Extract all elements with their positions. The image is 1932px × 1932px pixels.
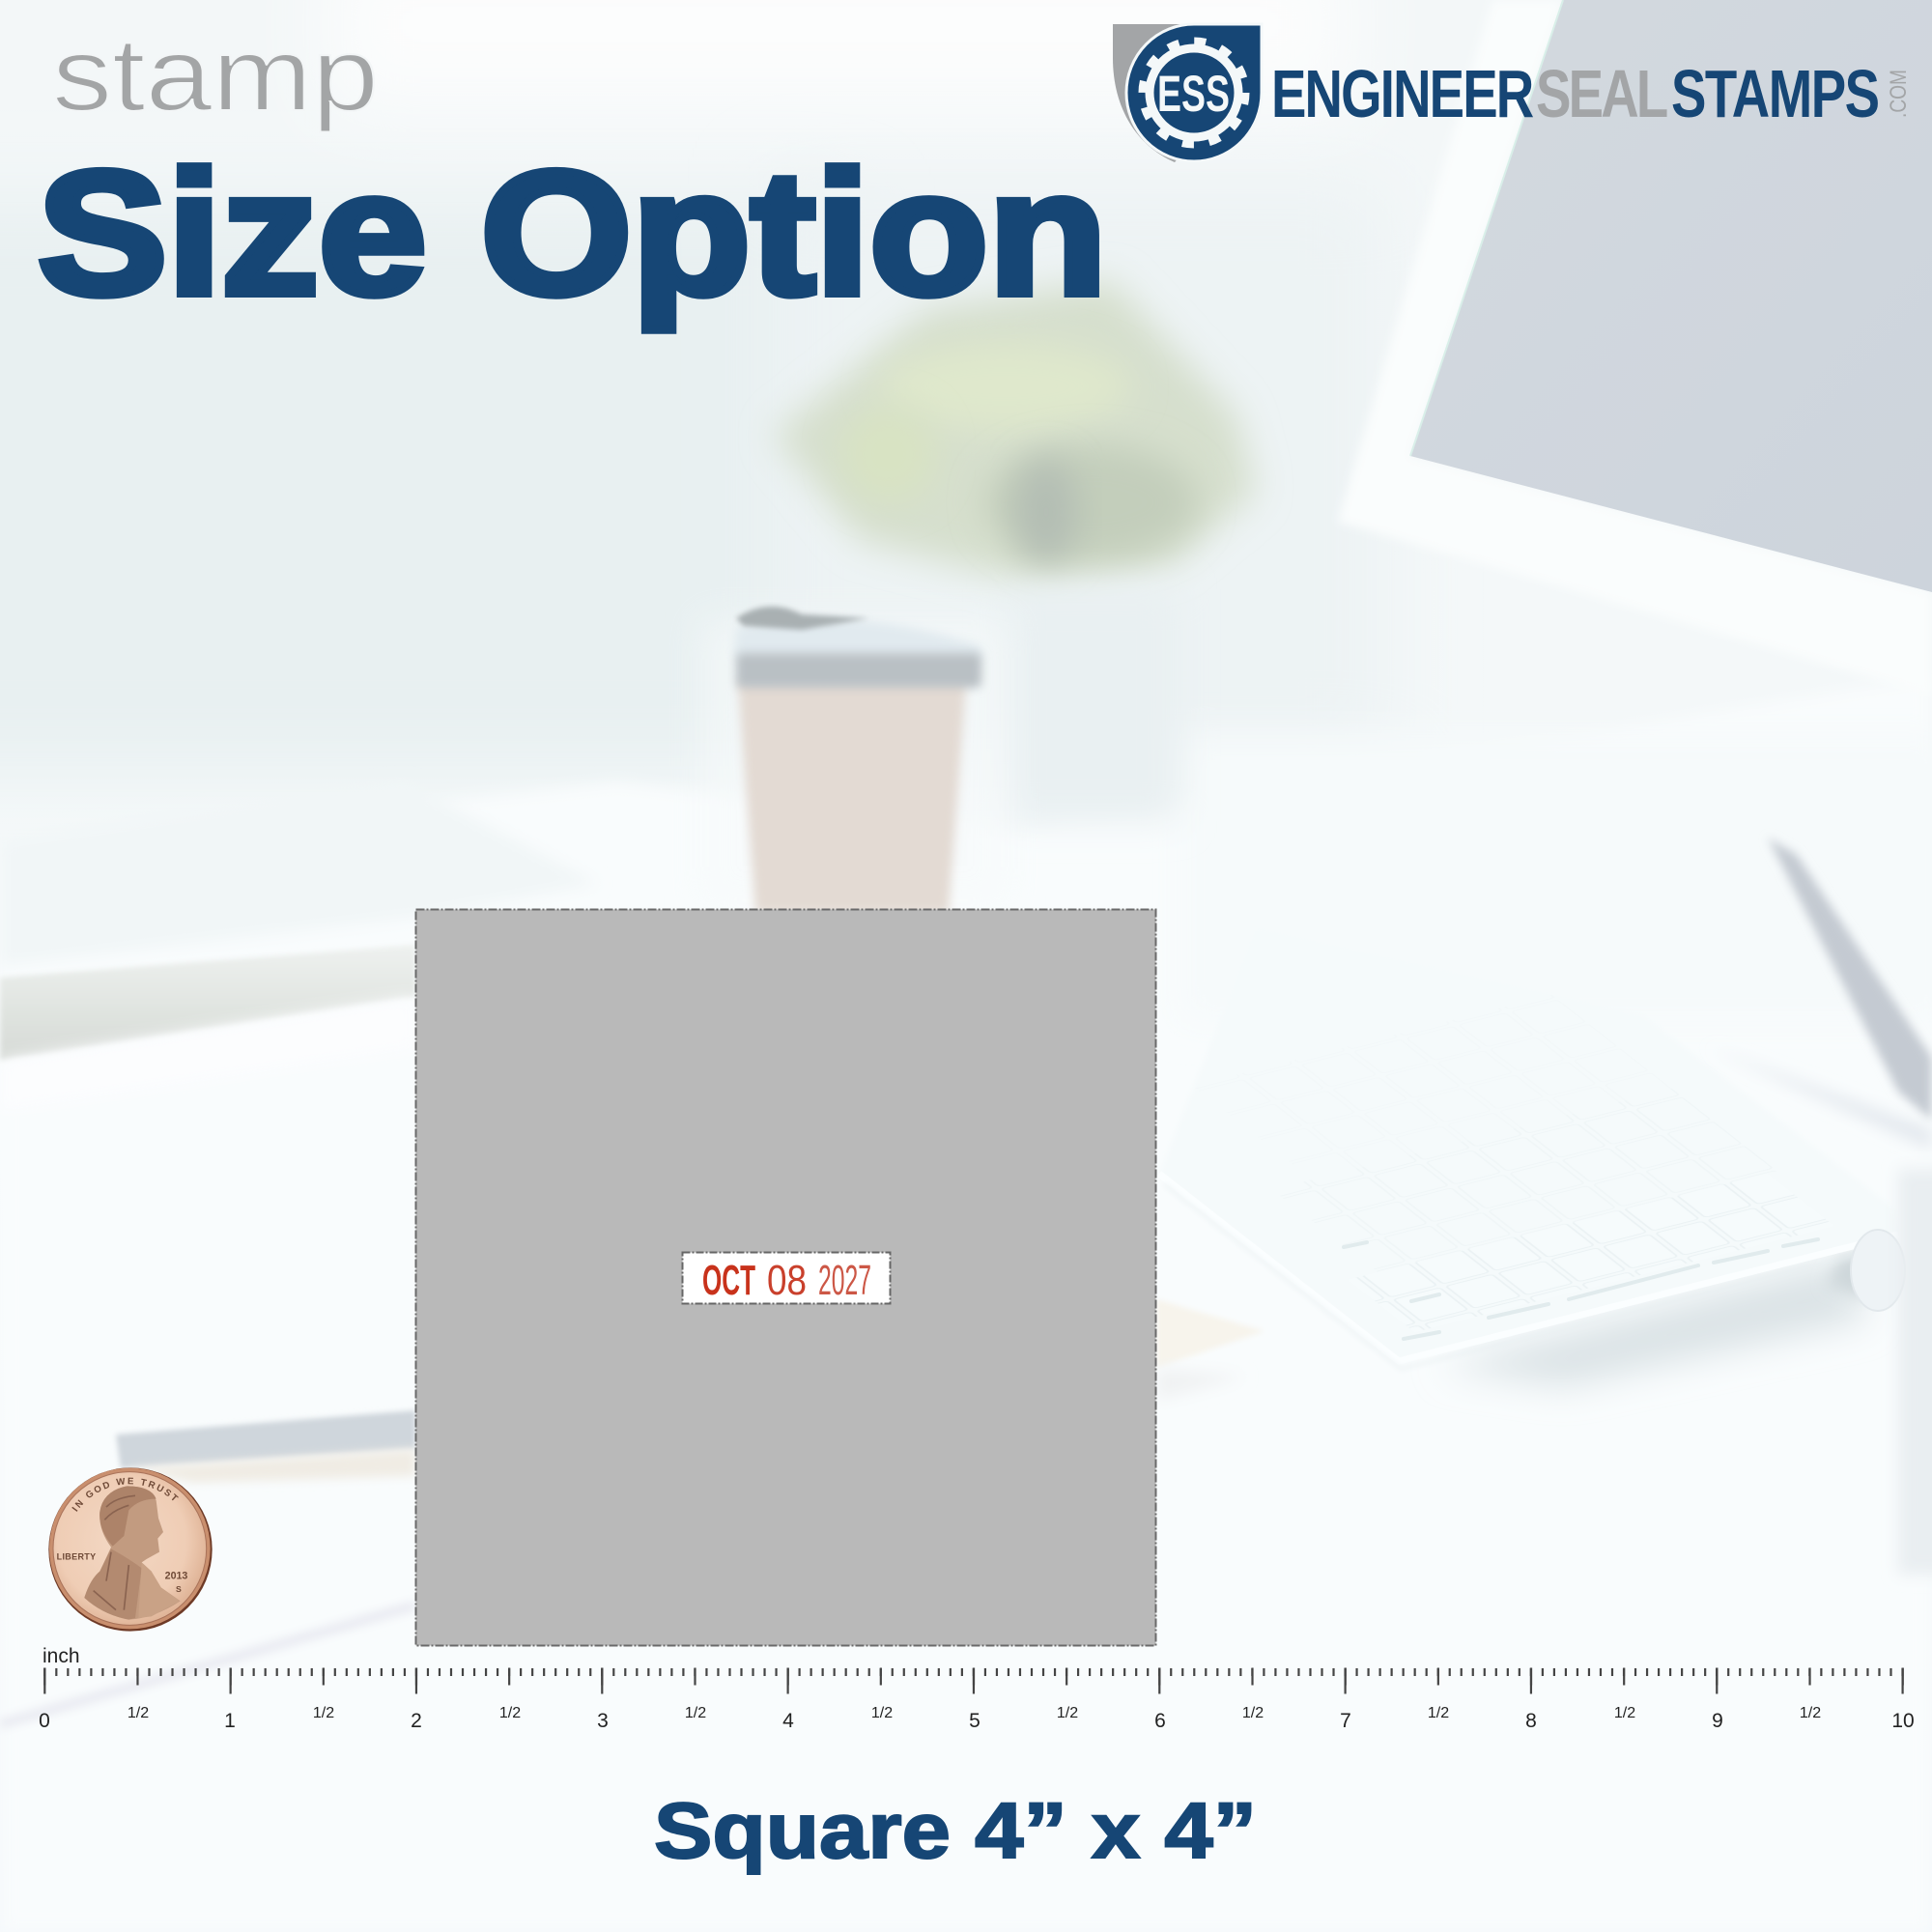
ruler inch numbers: 7 — [1340, 1710, 1351, 1732]
coffee cup — [700, 607, 1009, 913]
ruler unit label: inch — [43, 1645, 80, 1667]
icon: penny for scale: IN GOD WE TRUST — [71, 1478, 179, 1512]
date stamp sample: 08 — [767, 1257, 807, 1304]
plant pot — [1005, 589, 1179, 821]
logo emblem — [1113, 24, 1262, 162]
ruler inch numbers: 2 — [411, 1710, 422, 1732]
penny inscriptions: 2013 — [165, 1570, 187, 1581]
ruler inch numbers: 1 — [224, 1710, 236, 1732]
ruler half marks: 1/2 — [1057, 1705, 1078, 1721]
envelope — [1156, 1299, 1264, 1401]
logo: Engineer Seal Stamps — [1113, 24, 1912, 162]
logo wordmark: SEAL — [1536, 57, 1668, 132]
keyboard key edges — [1344, 1239, 1818, 1339]
pen on left — [0, 1410, 415, 1724]
heading: Size Option: Size Option — [38, 134, 1107, 331]
penny inscriptions — [57, 1552, 187, 1594]
ruler half marks: 1/2 — [128, 1705, 149, 1721]
heading: stamp: stamp — [52, 15, 379, 132]
penny inscriptions: LIBERTY — [57, 1552, 96, 1562]
ruler inch numbers — [39, 1710, 1915, 1732]
tablet and book on desk — [0, 782, 599, 1111]
inch ruler — [39, 1645, 1915, 1732]
ruler inch numbers: 10 — [1891, 1710, 1915, 1732]
ruler inch numbers: 9 — [1712, 1710, 1723, 1732]
icon: penny for scale — [48, 1467, 213, 1632]
ruler inch numbers: 6 — [1154, 1710, 1166, 1732]
ruler half marks: 1/2 — [685, 1705, 706, 1721]
date stamp sample: 2027 — [818, 1257, 871, 1304]
ruler inch numbers: 8 — [1525, 1710, 1537, 1732]
ruler half marks: 1/2 — [1800, 1705, 1821, 1721]
ruler half marks: 1/2 — [871, 1705, 893, 1721]
date stamp sample — [682, 1252, 891, 1304]
logo emblem: ESS — [1157, 66, 1230, 123]
ruler ticks — [43, 1672, 1904, 1681]
ruler half marks: 1/2 — [1614, 1705, 1635, 1721]
logo wordmark: .COM — [1886, 70, 1912, 118]
portrait — [84, 1486, 181, 1620]
size caption: Square 4” x 4” — [654, 1787, 1257, 1875]
ruler half marks: 1/2 — [1242, 1705, 1264, 1721]
date stamp sample: OCT — [702, 1257, 755, 1304]
ruler half marks — [128, 1705, 1821, 1721]
keyboard — [1122, 927, 1905, 1386]
ruler inch numbers: 3 — [597, 1710, 609, 1732]
ruler half marks: 1/2 — [313, 1705, 334, 1721]
monitor — [1338, 0, 1932, 696]
stamp impression area: gray 4 x 4 square — [415, 910, 1155, 1646]
ruler half marks: 1/2 — [499, 1705, 521, 1721]
ruler inch numbers: 4 — [782, 1710, 794, 1732]
ruler inch numbers: 0 — [39, 1710, 50, 1732]
penny inscriptions: S — [176, 1584, 182, 1594]
ruler inch numbers: 5 — [969, 1710, 980, 1732]
plant — [773, 280, 1256, 584]
logo wordmark: ENGINEER — [1271, 57, 1534, 132]
ruler half marks: 1/2 — [1428, 1705, 1449, 1721]
logo wordmark — [1271, 57, 1912, 132]
pens and holder at right — [1689, 838, 1932, 1575]
logo wordmark: STAMPS — [1671, 57, 1880, 132]
